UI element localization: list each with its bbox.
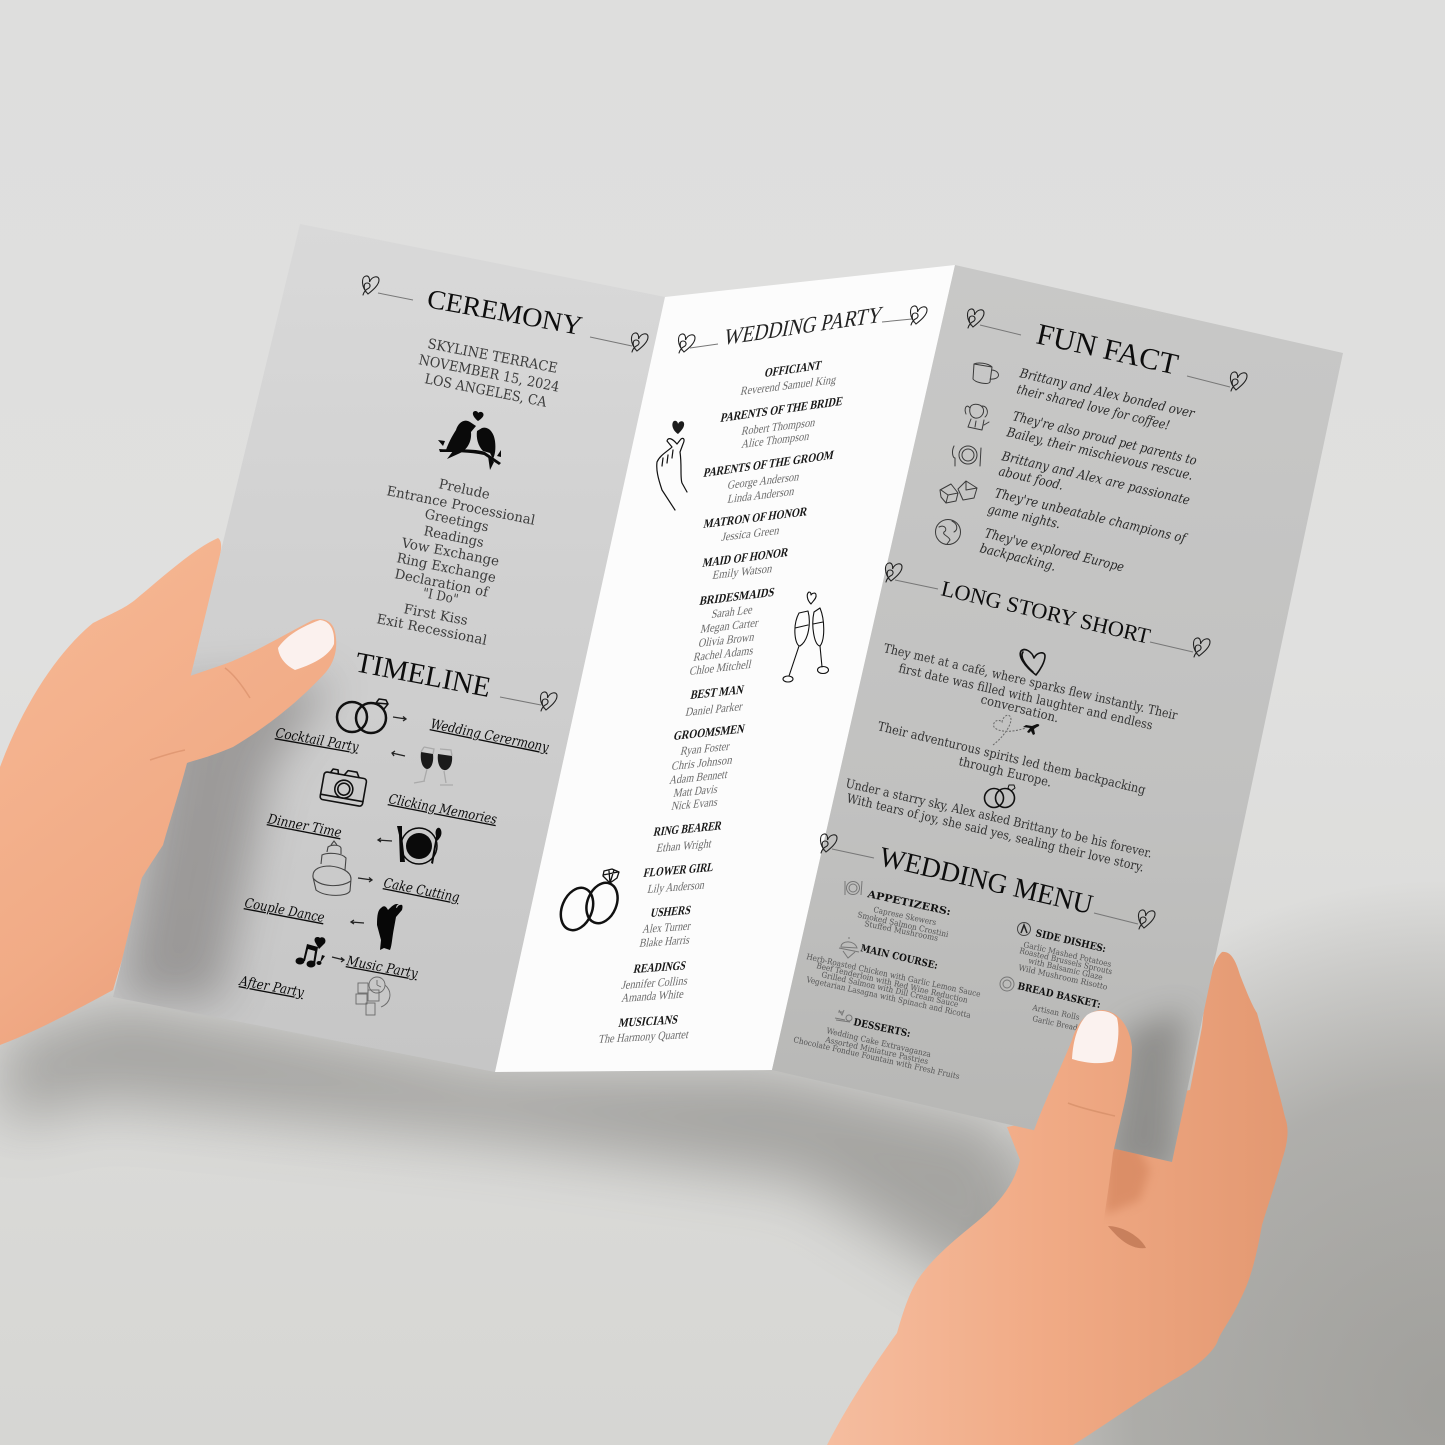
text block: ceremony order of service: Prelude	[437, 476, 491, 503]
text block: role headings: GROOMSMEN	[672, 721, 747, 743]
text block: names: Rachel Adams	[692, 643, 755, 664]
icon: rings	[337, 699, 388, 733]
shadow under brochure	[0, 1000, 1060, 1340]
icon: dashed plane path	[993, 715, 1039, 745]
palm crease	[1108, 1226, 1146, 1248]
text block: menu items: Vegetarian Lasagna with Spinach and Ricotta	[805, 975, 972, 1020]
heading: long story short	[885, 563, 1210, 657]
text block: names: Robert Thompson	[740, 415, 818, 438]
text block: role headings: READINGS	[632, 958, 688, 976]
text block: menu headings: MAIN COURSE:	[859, 943, 939, 972]
text block: menu headings: BREAD BASKET:	[1016, 981, 1102, 1011]
timeline labels: Wedding Cerermony	[429, 716, 550, 756]
timeline labels: Cake Cutting	[382, 875, 461, 906]
text block: ceremony order of service: Readings	[422, 523, 485, 551]
text block: menu headings: DESSERTS:	[852, 1017, 911, 1040]
text block: menu items: Beef Tenderloin with Red Wine Reduction	[816, 961, 969, 1005]
icon: camera	[320, 767, 368, 807]
text block: menu items: Chocolate Fondue Fountain with Fresh Fruits	[793, 1035, 960, 1081]
heading: wedding party: WEDDING PARTY	[722, 302, 885, 351]
text block: role headings: OFFICIANT	[763, 357, 823, 380]
heading: ceremony	[362, 276, 648, 352]
timeline labels: Cocktail Party	[274, 725, 360, 756]
text block: names: George Anderson	[726, 469, 802, 492]
text block: love story: Under a starry sky, Alex asked Brittany to be his forever.	[844, 775, 1154, 861]
text block: names: Sarah Lee	[710, 603, 754, 621]
text block: role headings: BRIDESMAIDS	[698, 584, 776, 608]
text block: menu items: Smoked Salmon Crostini	[857, 910, 950, 939]
text block: menu items: Stuffed Mushrooms	[864, 919, 939, 943]
text block: menu items: Grilled Salmon with Dill Cream Sauce	[821, 970, 959, 1009]
text block: menu items: Herb-Roasted Chicken with Garlic Lemon Sauce	[806, 952, 982, 999]
text block: role headings	[617, 357, 844, 1030]
text block: love story: first date was filled with laughter and endless	[897, 660, 1154, 733]
text block: fun facts: They're unbeatable champions of	[993, 486, 1189, 547]
text block: fun facts: game nights.	[986, 502, 1062, 532]
text block: ceremony order of service: Exit Recessional	[375, 611, 488, 649]
icons: fun fact mug, dog, plate, dice, globe	[936, 363, 999, 544]
icon: music notes	[296, 937, 325, 968]
text block: names: Megan Carter	[699, 616, 761, 636]
text block: ceremony order of service: Vow Exchange	[399, 535, 500, 570]
text block: role headings: MATRON OF HONOR	[702, 504, 809, 531]
text block: ceremony order of service: First Kiss	[402, 601, 469, 629]
text block: venue and date	[417, 336, 561, 411]
icon: champagne flutes	[783, 592, 828, 682]
thumb knuckle crease	[1068, 1103, 1115, 1116]
text block: fun facts: backpacking.	[978, 541, 1057, 575]
text block: role headings: PARENTS OF THE GROOM	[702, 447, 835, 480]
text block: menu items: Roasted Brussels Sprouts	[1019, 946, 1113, 976]
timeline labels: Clicking Memories	[387, 791, 498, 828]
text block: names: Jessica Green	[720, 523, 782, 544]
text block: ceremony order of service: Declaration of	[393, 566, 490, 601]
text block: names: Lily Anderson	[646, 878, 707, 896]
timeline labels: Music Party	[344, 953, 419, 982]
icon: after party collage	[356, 977, 390, 1015]
panel: ceremony	[113, 224, 665, 1072]
text block: names: Reverend Samuel King	[739, 373, 838, 398]
text block: names: Jennifer Collins	[620, 974, 689, 992]
text block: menu items	[793, 905, 1113, 1081]
text block: menu headings: SIDE DISHES:	[1034, 928, 1107, 955]
text block: names: Alice Thompson	[740, 429, 812, 451]
text block: names: Daniel Parker	[684, 699, 745, 719]
text block: role headings: BEST MAN	[689, 682, 746, 702]
text block: love story: They met at a café, where sparks flew instantly. Their	[882, 640, 1179, 723]
timeline labels: After Party	[237, 973, 305, 1001]
timeline labels: Couple Dance	[243, 895, 326, 926]
heading: ceremony: CEREMONY	[425, 283, 585, 341]
panel: wedding party	[495, 265, 955, 1072]
shadow right of hand	[925, 880, 1445, 1445]
icon: plate and cutlery	[397, 826, 441, 864]
text block: fun facts: about food.	[997, 464, 1065, 494]
text block: names: Olivia Brown	[697, 630, 757, 650]
text block: role headings: USHERS	[649, 902, 693, 920]
heading: timeline: TIMELINE	[353, 646, 493, 704]
text block: venue and date: SKYLINE TERRACE	[426, 336, 559, 377]
left hand back fingers	[0, 538, 221, 1045]
text block: menu items: Artisan Rolls	[1031, 1003, 1080, 1022]
left thumbnail	[278, 620, 334, 670]
icon: dancing couple	[377, 904, 403, 950]
text block: names: Adam Bennett	[668, 767, 730, 787]
right hand back and wrist	[827, 952, 1288, 1445]
text block: role headings: FLOWER GIRL	[642, 859, 716, 880]
text block: role headings: MUSICIANS	[617, 1012, 680, 1030]
text block: menu headings: APPETIZERS:	[865, 889, 952, 918]
text block: fun facts: They're also proud pet parents to	[1011, 409, 1198, 469]
text block: fun facts: Brittany and Alex bonded over	[1017, 366, 1196, 422]
heading: wedding menu: WEDDING MENU	[876, 842, 1096, 921]
text block: names: Alex Turner	[641, 919, 693, 936]
text block: ceremony order of service: Entrance Processional	[385, 483, 536, 529]
text block: names: The Harmony Quartet	[597, 1027, 691, 1046]
right thumbnail	[1072, 1011, 1118, 1063]
text block: ceremony order of service	[375, 476, 536, 649]
text block: love story: conversation.	[979, 691, 1061, 725]
text block: names: Emily Watson	[711, 561, 775, 582]
heading: wedding menu	[820, 834, 1155, 929]
text block: fun facts	[978, 366, 1198, 576]
icon: love birds	[438, 411, 501, 470]
text block: fun facts: Brittany and Alex are passionate	[999, 449, 1192, 509]
text block: role headings: RING BEARER	[652, 818, 724, 839]
text block: menu items: Caprese Skewers	[873, 905, 937, 927]
text block: menu items: Garlic Mashed Potatoes	[1023, 940, 1112, 969]
text block: role headings: PARENTS OF THE BRIDE	[719, 393, 844, 425]
panel: fun fact, story and menu	[772, 265, 1343, 1175]
text block: love story: through Europe.	[957, 753, 1053, 790]
text block: names: Ryan Foster	[679, 739, 732, 758]
text block: fun facts: They've explored Europe	[983, 526, 1126, 576]
text block: love story: With tears of joy, she said yes, sealing their love story.	[845, 790, 1146, 875]
heading: fun fact: FUN FACT	[1033, 318, 1181, 381]
icon: wedding rings	[555, 869, 623, 935]
text block: names	[597, 373, 838, 1046]
timeline arrows	[332, 716, 406, 962]
text block: venue and date: NOVEMBER 15, 2024	[417, 352, 561, 396]
text block: venue and date: LOS ANGELES, CA	[423, 371, 549, 411]
text block: names: Matt Davis	[672, 782, 719, 800]
timeline labels: Dinner Time	[265, 811, 343, 841]
icon: wine glasses	[414, 747, 453, 785]
text block: menu items: Assorted Miniature Pastries	[824, 1035, 929, 1066]
text block: love story: Their adventurous spirits led them backpacking	[876, 718, 1147, 797]
left thumb	[120, 619, 336, 890]
text block: names: Nick Evans	[670, 795, 719, 813]
text block: fun facts: Bailey, their mischievous rescue.	[1004, 425, 1194, 484]
text block: names: Chloe Mitchell	[688, 657, 753, 678]
timeline labels	[237, 716, 550, 1001]
text block: ceremony order of service: Greetings	[423, 506, 490, 535]
shadow between thumb and fingers	[1105, 1120, 1150, 1215]
heading: timeline	[353, 646, 557, 711]
text block: menu items: Garlic Bread	[1032, 1014, 1078, 1033]
thumb knuckle crease	[150, 668, 250, 760]
text block: names: Ethan Wright	[655, 836, 714, 855]
text block: menu items: with Balsamic Glaze	[1028, 956, 1104, 982]
heading: long story short: LONG STORY SHORT	[939, 576, 1153, 649]
icon: sketched heart	[1020, 650, 1045, 675]
text block: ceremony order of service: "I Do"	[421, 585, 460, 608]
text block: menu items: Wild Mushroom Risotto	[1018, 963, 1109, 992]
text block: ceremony order of service: Ring Exchange	[395, 550, 497, 586]
text block: names: Amanda White	[620, 987, 686, 1005]
text block: names: Chris Johnson	[670, 753, 735, 773]
icon: wedding cake	[313, 841, 351, 895]
text block: love story	[844, 640, 1179, 875]
right thumb	[1020, 1010, 1132, 1230]
text block: names: Blake Harris	[638, 933, 691, 950]
text block: role headings: MAID OF HONOR	[701, 544, 791, 570]
heading: fun fact	[967, 309, 1247, 391]
text block: menu items: Wedding Cake Extravaganza	[826, 1026, 932, 1059]
text block: names: Linda Anderson	[726, 484, 797, 506]
icons: menu courses	[835, 881, 1030, 1022]
icon: rings small	[984, 785, 1015, 808]
icon: finger heart hand	[657, 421, 687, 510]
text block: fun facts: their shared love for coffee!	[1015, 382, 1171, 434]
text block: menu headings	[852, 889, 1107, 1040]
